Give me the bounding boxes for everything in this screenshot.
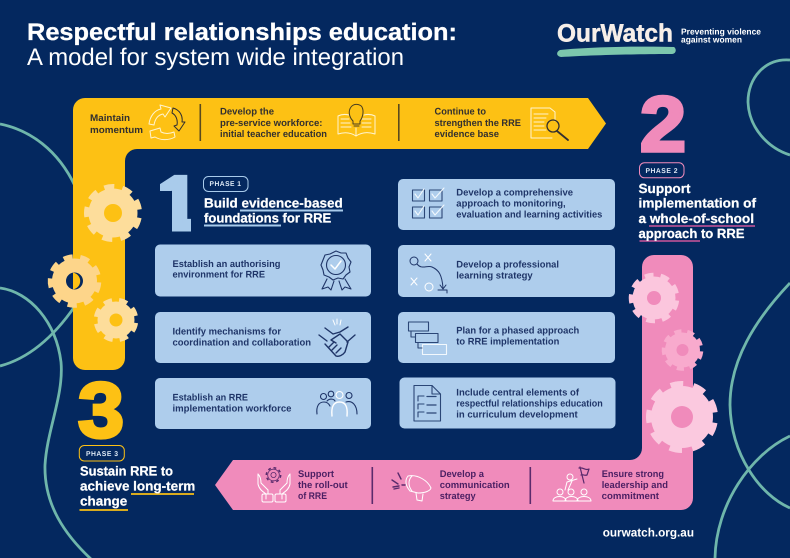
card: phased approach — [398, 312, 615, 363]
card: professional learning strategy: learning strategy — [456, 270, 533, 281]
text: communication strategy: communication — [440, 480, 510, 491]
title: A model for system wide integration — [27, 44, 404, 71]
heading: phase 1 — [204, 196, 343, 226]
heading: phase 3: change — [80, 494, 127, 509]
text: maintain momentum: Maintain — [90, 113, 130, 124]
card: monitoring and evaluation — [398, 179, 615, 230]
card: curriculum development: Include central elements of — [456, 388, 580, 399]
panel: phase 1 heading — [160, 174, 343, 232]
title: Respectful relationships education: — [27, 19, 457, 46]
text: pre-service workforce — [220, 107, 327, 140]
numeral 2: 2 — [640, 80, 686, 168]
logo: Our Watch — [557, 20, 761, 57]
card: curriculum development — [400, 378, 616, 428]
card: curriculum development: respectful relationships education — [456, 399, 603, 410]
text: communication strategy — [440, 469, 510, 502]
text: leadership and commitment: Ensure strong — [602, 469, 664, 480]
heading: phase 1: foundations for RRE — [204, 211, 331, 226]
icon: pink gears — [628, 272, 720, 455]
text: evidence base: strengthen the RRE — [434, 118, 522, 129]
badge: phase 2 — [640, 163, 684, 178]
logo: Our Watch: Preventing violence — [681, 26, 761, 36]
panel: phase 2 heading — [638, 80, 757, 241]
card: authorising environment: Establish an authorising — [172, 259, 281, 270]
card: authorising environment: environment for RRE — [172, 270, 266, 281]
text: support the roll-out: Support — [298, 469, 335, 480]
text: pre-service workforce: initial teacher education — [220, 129, 327, 140]
panel: pink phase 2 arrow band — [215, 255, 693, 510]
text: leadership and commitment: leadership and — [602, 480, 668, 491]
text: communication strategy: strategy — [440, 491, 476, 502]
heading: phase 2: a whole-of-school — [638, 211, 754, 226]
text: maintain momentum — [90, 113, 143, 136]
badge: phase 3 — [79, 446, 124, 461]
card: professional learning strategy — [398, 245, 615, 297]
panel: phase 3 heading — [78, 366, 195, 510]
badge: phase 2: PHASE 2 — [646, 168, 678, 175]
heading: phase 2: Support — [638, 181, 691, 196]
icon: leader with flag and group — [553, 467, 591, 501]
card: coordination and collaboration: Identify mechanisms for — [172, 327, 281, 338]
card: implementation workforce: Establish an RRE — [172, 393, 249, 404]
text: maintain momentum: momentum — [90, 125, 143, 136]
card: monitoring and evaluation: Develop a comprehensive — [456, 188, 573, 199]
icon: award rosette — [321, 251, 351, 290]
heading: phase 2: implementation of — [638, 196, 757, 211]
badge: phase 3: PHASE 3 — [86, 451, 118, 458]
card: professional learning strategy: Develop a professional — [456, 260, 559, 271]
icon: handshake — [319, 319, 355, 356]
logo: Our Watch: against women — [681, 34, 742, 44]
text: pre-service workforce: pre-service workforce: — [220, 118, 322, 129]
icon: megaphone — [392, 473, 431, 501]
logo: Our Watch: OurWatch — [557, 20, 673, 48]
text: support the roll-out: the roll-out — [298, 480, 348, 491]
heading: phase 2 — [638, 181, 757, 241]
heading: phase 1: Build evidence-based — [204, 196, 343, 211]
icon: yellow gears — [48, 182, 144, 343]
text: evidence base: Continue to — [434, 107, 486, 118]
card: implementation workforce: implementation workforce — [172, 404, 292, 415]
badge: phase 1: PHASE 1 — [210, 181, 242, 188]
text: leadership and commitment: commitment — [602, 491, 660, 502]
text: evidence base: evidence base — [434, 129, 499, 140]
card: phased approach: Plan for a phased approach — [456, 326, 579, 337]
icon: book and light bulb — [338, 104, 375, 136]
heading: phase 3: achieve long-term — [80, 479, 195, 494]
card: coordination and collaboration: coordination and collaboration — [172, 338, 311, 349]
card: implementation workforce — [155, 378, 371, 429]
title — [27, 19, 457, 71]
website url: ourwatch.org.au — [603, 526, 694, 540]
numeral 3: 3 — [78, 366, 124, 454]
badge: phase 1 — [204, 176, 248, 192]
icon: document and magnifier — [531, 108, 568, 140]
text: communication strategy: Develop a — [440, 469, 485, 480]
card: authorising environment — [155, 244, 371, 296]
icon: group of people — [317, 391, 357, 416]
heading: phase 3: Sustain RRE to — [80, 464, 173, 479]
card: curriculum development: in curriculum development — [456, 410, 578, 421]
numeral 1: 1 — [157, 161, 199, 245]
text: pre-service workforce: Develop the — [220, 107, 274, 118]
icon: stepped boxes — [408, 322, 446, 354]
icon: checklist document — [414, 386, 440, 421]
icon: hands holding gear — [258, 468, 290, 502]
icon: strategy play diagram — [410, 254, 447, 293]
icon: checkboxes — [412, 188, 444, 218]
card: monitoring and evaluation: approach to monitoring, — [456, 199, 566, 210]
panel: yellow phase 3 arrow band — [73, 98, 606, 370]
card: monitoring and evaluation: evaluation and learning activities — [456, 210, 602, 221]
icon: cycle arrows — [149, 105, 185, 140]
card: phased approach: to RRE implementation — [456, 337, 559, 348]
text: support the roll-out — [298, 469, 348, 502]
heading: phase 2: approach to RRE — [638, 226, 745, 241]
text: evidence base — [434, 107, 522, 140]
card: coordination and collaboration — [155, 312, 371, 363]
text: leadership and commitment — [602, 469, 668, 502]
text: support the roll-out: of RRE — [298, 491, 328, 502]
heading: phase 3 — [80, 464, 195, 510]
